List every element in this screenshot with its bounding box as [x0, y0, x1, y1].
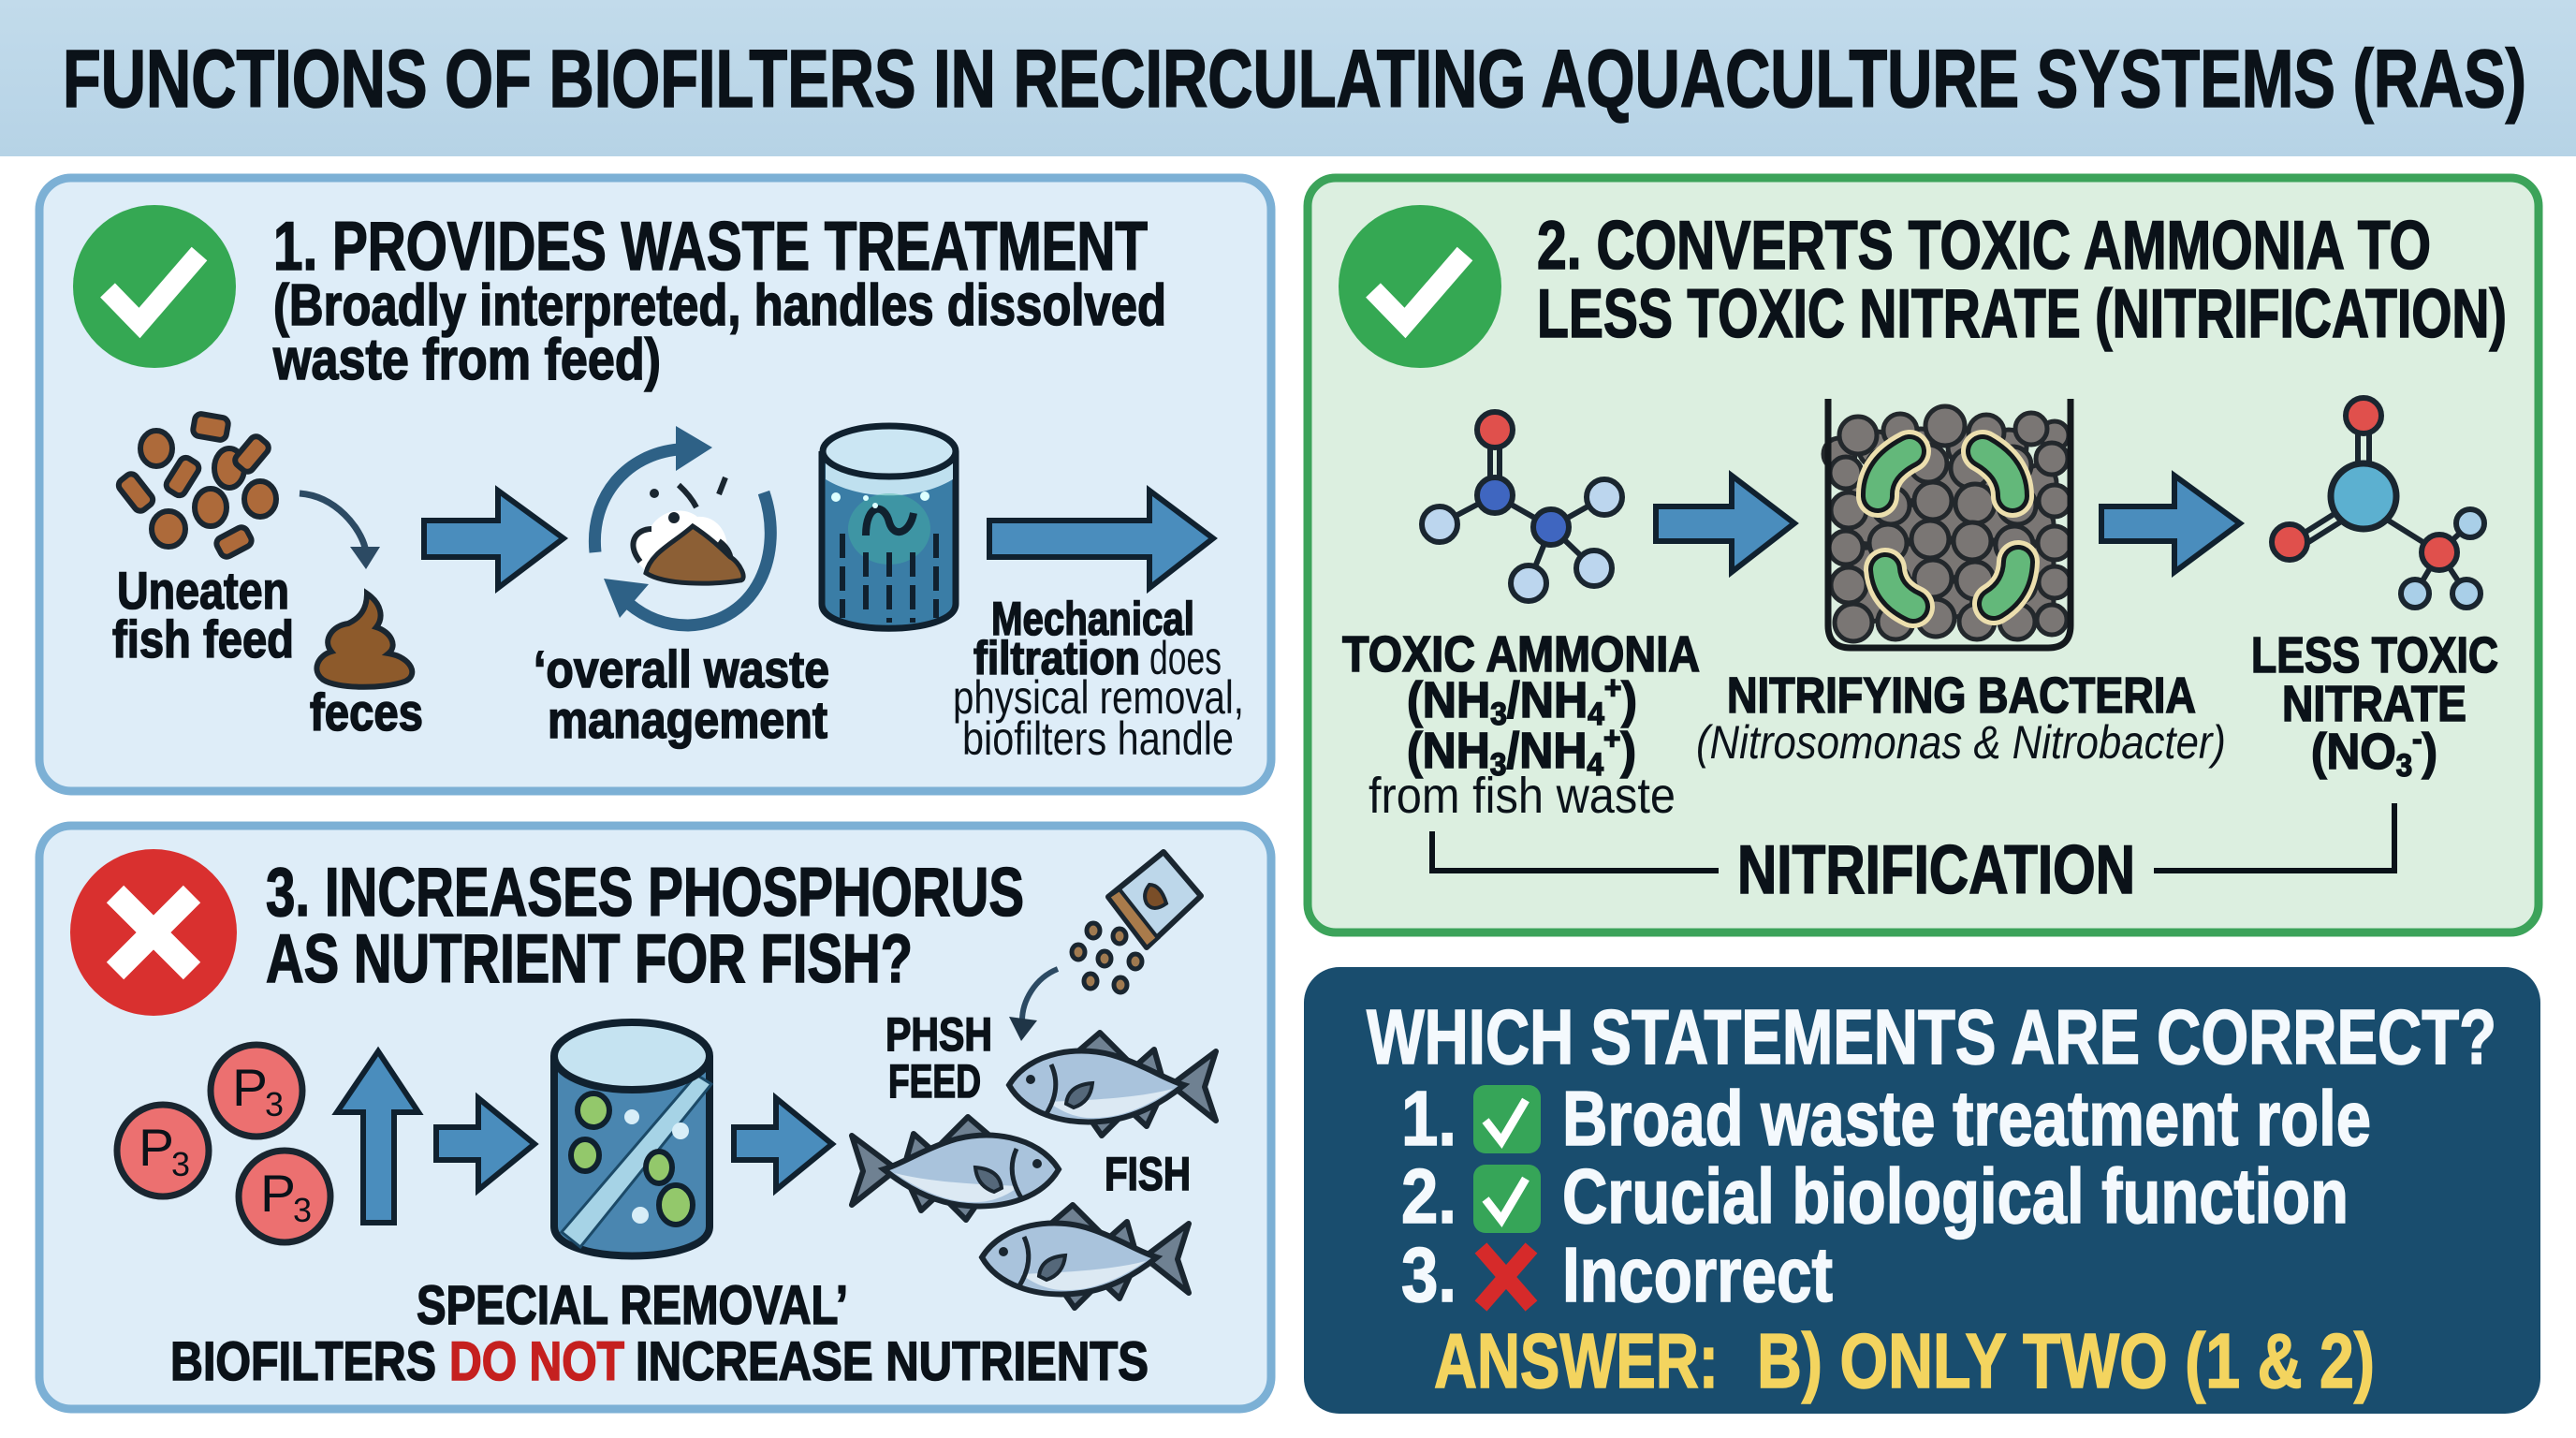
- label: overall waste management: management: [548, 690, 827, 749]
- icon: phosphorus particles: 3: [293, 1191, 312, 1229]
- arrow 5: [436, 1098, 534, 1190]
- label: toxic ammonia: from fish waste: [1368, 768, 1676, 824]
- statement 2: 2.: [1401, 1152, 1456, 1240]
- label: less toxic nitrate: (NO: [2311, 724, 2404, 780]
- icon: red cross badge: [70, 849, 237, 1016]
- heading: increases phosphorus: 3. INCREASES PHOSPHORUS: [266, 855, 1024, 931]
- label: fish: FISH: [1105, 1148, 1191, 1200]
- icon: feed bag with pellets: [1072, 852, 1201, 992]
- label: toxic ammonia: (NH: [1407, 723, 1497, 779]
- header band with title: [0, 0, 2576, 156]
- heading: increases phosphorus: AS NUTRIENT FOR FISH?: [266, 921, 913, 997]
- label: overall waste management: [534, 639, 829, 749]
- label: toxic ammonia: ): [1620, 723, 1636, 779]
- label: less toxic nitrate: -: [2412, 722, 2422, 757]
- label: mechanical filtration note: does: [1149, 632, 1222, 684]
- text: biofilters do not increase nutrients: INCREASE NUTRIENTS: [636, 1331, 1149, 1392]
- statement 2: Crucial biological function: [1562, 1152, 2349, 1240]
- arrow 6: [734, 1098, 832, 1190]
- statement 1: Broad waste treatment role: [1562, 1075, 2371, 1162]
- statement 3: Incorrect: [1562, 1231, 1833, 1318]
- icon: check box: [1473, 1085, 1541, 1153]
- text: biofilters do not increase nutrients: DO NOT: [449, 1331, 624, 1392]
- icon: phosphorus particles: P: [139, 1118, 174, 1177]
- arrow 2: [989, 491, 1213, 588]
- icon: bacteria media beaker: [1823, 399, 2071, 648]
- icon: fish top: [1009, 1033, 1216, 1136]
- panel: 2 converts ammonia to nitrate: [1308, 178, 2539, 932]
- statement 3: [1401, 1231, 1833, 1318]
- label: toxic ammonia: [1342, 626, 1700, 824]
- label: toxic ammonia: /NH: [1507, 672, 1588, 728]
- label: phsh feed: FEED: [888, 1055, 981, 1108]
- icon: phosphorus particles: 3: [171, 1145, 190, 1183]
- label: mechanical filtration note: Mechanical: [991, 593, 1194, 645]
- panel: 3 increases phosphorus: [39, 826, 1271, 1409]
- label: toxic ammonia: (NH: [1407, 672, 1497, 728]
- label: toxic ammonia: +: [1603, 721, 1620, 756]
- subheading: [272, 273, 1166, 392]
- nitrification bracket: [1432, 803, 2394, 908]
- icon: feces: [316, 594, 412, 687]
- statement 3: 3.: [1401, 1231, 1456, 1318]
- icon: nitrate molecule: [2272, 398, 2484, 608]
- icon: phosphorus particles: P: [260, 1164, 296, 1223]
- label: nitrifying bacteria: [1696, 668, 2226, 769]
- icon: phosphorus particles: P: [232, 1058, 268, 1117]
- icon: phosphorus particles: [117, 1045, 330, 1242]
- panel: 1 provides waste treatment: [39, 178, 1271, 791]
- icon: green check badge: [1339, 205, 1501, 368]
- answer: B) ONLY TWO (1 & 2): [1757, 1317, 2375, 1404]
- icon: crossed filter cylinder: [554, 1022, 711, 1256]
- label: less toxic nitrate: ): [2422, 724, 2437, 780]
- text: biofilters do not increase nutrients: [170, 1331, 1149, 1392]
- label: mechanical filtration note: biofilters handle: [962, 712, 1234, 765]
- icon: waste cycle: [594, 426, 770, 625]
- label: toxic ammonia: ): [1621, 672, 1637, 728]
- arrow: up increase: [337, 1051, 418, 1223]
- icon: fish middle: [852, 1117, 1059, 1220]
- label: phsh feed: [886, 1008, 992, 1108]
- heading: provides waste treatment: 1. PROVIDES WASTE TREATMENT: [273, 209, 1148, 285]
- label: less toxic nitrate: LESS TOXIC: [2251, 627, 2498, 683]
- label: nitrifying bacteria: NITRIFYING BACTERIA: [1727, 668, 2196, 724]
- label: toxic ammonia: 4: [1587, 747, 1603, 783]
- label: toxic ammonia: 3: [1490, 747, 1506, 783]
- arrow: feed to feces: [300, 493, 380, 569]
- subheading: (Broadly interpreted, handles dissolved: [273, 273, 1166, 338]
- label: uneaten fish feed: [112, 561, 294, 668]
- label: uneaten fish feed: fish feed: [112, 609, 294, 668]
- label: less toxic nitrate: NITRATE: [2282, 676, 2466, 732]
- label: mechanical filtration note: physical removal,: [953, 671, 1244, 724]
- answer: ANSWER:: [1434, 1317, 1719, 1404]
- label: toxic ammonia: 3: [1490, 697, 1507, 732]
- answer: [1434, 1317, 2375, 1404]
- label: less toxic nitrate: [2251, 627, 2498, 784]
- label: toxic ammonia: 4: [1588, 697, 1604, 732]
- statement 1: [1401, 1075, 2371, 1162]
- label: nitrifying bacteria: (Nitrosomonas & Nitrobacter): [1696, 716, 2226, 769]
- icon: fish bottom: [982, 1205, 1189, 1308]
- label: toxic ammonia: TOXIC AMMONIA: [1342, 626, 1700, 682]
- label: uneaten fish feed: Uneaten: [117, 561, 289, 620]
- arrow 4: [2101, 476, 2240, 572]
- label: phsh feed: PHSH: [886, 1008, 992, 1061]
- text: biofilters do not increase nutrients: BIOFILTERS: [170, 1331, 436, 1392]
- text: special removal: SPECIAL REMOVAL’: [417, 1275, 848, 1336]
- arrow 3: [1656, 476, 1794, 572]
- icon: filter cylinder: [822, 426, 956, 628]
- label: less toxic nitrate: 3: [2396, 748, 2412, 784]
- icon: ammonia molecule: [1422, 412, 1622, 601]
- label: overall waste management: ‘overall waste: [534, 639, 829, 698]
- icon: check box: [1473, 1165, 1541, 1233]
- icon: phosphorus particles: 3: [265, 1085, 284, 1123]
- panel: which statements are correct: [1304, 967, 2540, 1414]
- label: nitrification: NITRIFICATION: [1737, 832, 2135, 908]
- heading: increases phosphorus: [266, 855, 1024, 997]
- heading: converts toxic ammonia: [1537, 208, 2507, 352]
- icon: green check badge: [73, 205, 236, 368]
- icon: feed pellets: [116, 413, 276, 559]
- label: mechanical filtration note: [953, 593, 1244, 765]
- subheading: waste from feed): [272, 328, 661, 392]
- label: toxic ammonia: +: [1604, 670, 1621, 706]
- label: feces: feces: [310, 682, 423, 741]
- label: mechanical filtration note: filtration: [973, 632, 1140, 684]
- statement 2: [1401, 1152, 2349, 1240]
- statement 1: 1.: [1401, 1075, 1456, 1162]
- arrow 1: [424, 491, 564, 588]
- label: toxic ammonia: /NH: [1506, 723, 1587, 779]
- arrow: feed to fish: [1009, 969, 1058, 1041]
- icon: red cross: [1481, 1248, 1531, 1306]
